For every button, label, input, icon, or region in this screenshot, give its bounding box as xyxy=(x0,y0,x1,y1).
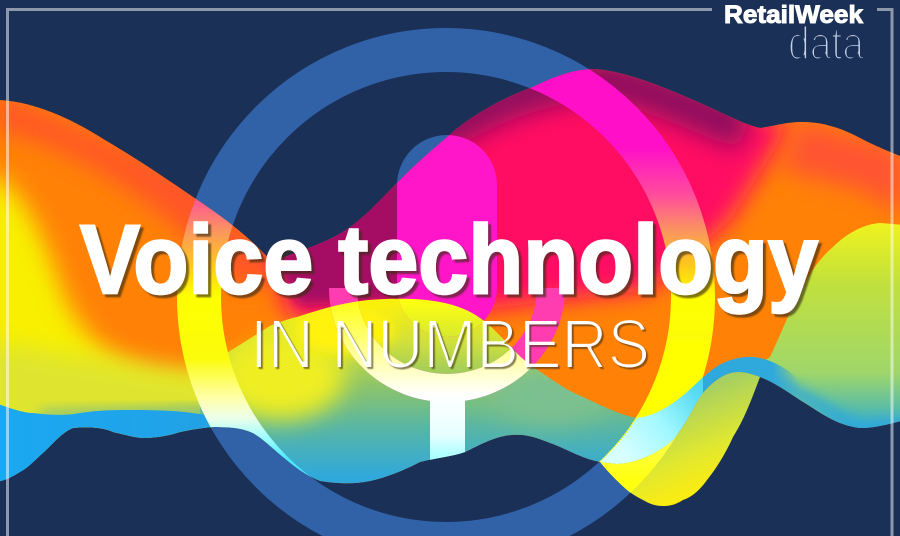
subtitle: IN NUMBERS xyxy=(250,305,650,383)
right green shape xyxy=(750,223,900,440)
left blue band xyxy=(0,404,247,482)
colour wave xyxy=(0,69,900,484)
mic overlay xyxy=(343,135,551,460)
cyan ribbon inside ring xyxy=(600,377,703,464)
ribbon xyxy=(770,378,900,428)
yellow drop xyxy=(600,372,760,506)
mic lower highlight xyxy=(330,298,532,460)
logo: Retail Week data xyxy=(724,1,864,69)
title: Voice technology xyxy=(80,205,818,314)
icon: microphone capsule xyxy=(397,135,497,337)
mid wave xyxy=(200,298,715,484)
ring: microphone circle xyxy=(199,50,693,536)
logo: Retail Week data: RetailWeek xyxy=(724,1,863,29)
ring overlay xyxy=(199,50,693,536)
logo: Retail Week data: data xyxy=(788,17,864,69)
